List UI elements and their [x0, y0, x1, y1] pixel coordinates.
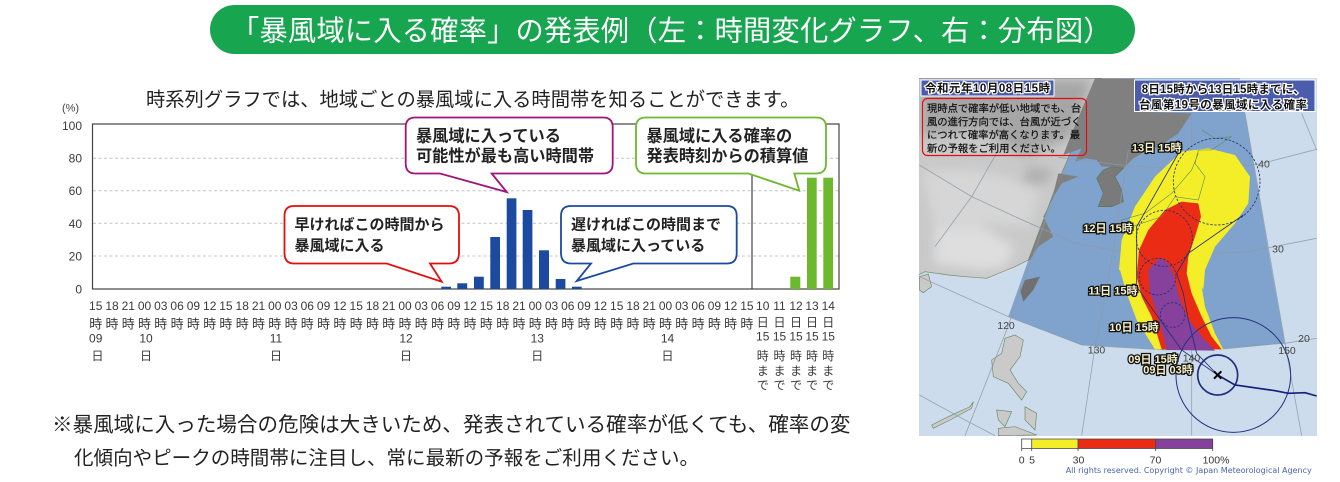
cumulative column labels: 時: [822, 349, 834, 363]
callout: latest time (blue): 遅ければこの時間まで: [571, 216, 721, 234]
y axis labels: 100: [62, 119, 82, 133]
x axis hour labels: 09: [708, 299, 721, 313]
cumulative column labels: 日: [773, 316, 786, 330]
x axis hour labels: 15: [740, 299, 754, 313]
x axis hour labels: 21: [643, 299, 656, 313]
lat and lon labels: 20: [1298, 333, 1310, 345]
Taiwan: [1020, 277, 1040, 302]
forecast time labels: 10日 15時: [1109, 320, 1159, 334]
cumulative column labels: で: [757, 378, 769, 392]
x axis hour labels: 18: [236, 299, 249, 313]
forecast time labels: 12日 15時: [1083, 221, 1133, 235]
x axis date labels: 日: [270, 349, 282, 363]
x axis hour labels: 21: [382, 299, 396, 313]
lat and lon labels: 150: [1278, 345, 1296, 357]
purple area: 70-100%: [1148, 257, 1215, 351]
yellow area: 5-30%: [1119, 148, 1250, 349]
lat and lon labels: [997, 158, 1310, 364]
x axis hour labels: 18: [496, 299, 510, 313]
callout: cumulative value (green): [636, 118, 826, 191]
map note callout: につれて確率が高くなります。最: [927, 128, 1080, 142]
cumulative column labels: 日: [790, 316, 802, 330]
x axis hour labels: 12: [594, 299, 607, 313]
forecast track and circles: [1136, 138, 1317, 432]
x axis hour labels: 09: [447, 299, 461, 313]
x axis date labels: 14: [661, 332, 674, 346]
x axis hour labels: 00: [268, 299, 282, 313]
x axis hour labels: 03: [415, 299, 428, 313]
lat and lon labels: 30: [1272, 244, 1284, 256]
callout: most likely time (purple): 暴風域に入っている: [416, 128, 561, 146]
x axis date labels: 12: [399, 332, 413, 346]
cumulative column labels: 時: [790, 349, 802, 363]
legend: probability colour scale: 30: [1073, 454, 1084, 466]
y axis labels: 20: [69, 250, 82, 264]
Philippines: [932, 335, 1037, 436]
x axis date labels: 日: [531, 349, 543, 363]
callout: most likely time (purple): [406, 118, 613, 192]
x axis hour labels: 06: [691, 299, 705, 313]
probability heading box: [1134, 80, 1315, 112]
x axis hour labels: 12: [463, 299, 477, 313]
x axis hour labels: [89, 299, 754, 332]
note text: 化傾向やピークの時間帯に注目し、常に最新の予報をご利用ください。: [74, 448, 699, 470]
x axis hour labels: 15: [480, 299, 493, 313]
legend: probability colour scale: 0: [1019, 454, 1025, 466]
cumulative column labels: 日: [757, 316, 769, 330]
legend: probability colour scale: [1019, 439, 1229, 466]
cumulative column labels: 11: [773, 299, 786, 313]
x axis hour labels: 12: [333, 299, 347, 313]
x axis hour labels: 15: [219, 299, 233, 313]
x axis hour labels: 03: [154, 299, 168, 313]
probability heading box: 8日15時から13日15時までに、: [1142, 82, 1305, 96]
callout: latest time (blue): 暴風域に入っている: [571, 238, 705, 254]
y axis labels: 0: [75, 282, 82, 296]
blue bars: probability per time slot: [441, 198, 582, 289]
cumulative column labels: 日: [806, 316, 818, 330]
x axis date labels: 日: [91, 349, 104, 363]
x axis date labels: 09: [89, 332, 103, 346]
cumulative column labels: で: [773, 378, 786, 392]
lat and lon labels: 130: [1088, 344, 1105, 356]
x axis hour labels: 06: [431, 299, 445, 313]
x axis hour labels: 18: [366, 299, 379, 313]
cumulative column labels: ま: [790, 364, 802, 378]
x axis hour labels: 21: [512, 299, 526, 313]
typhoon centre mark: [1214, 371, 1221, 379]
y axis labels: 40: [69, 217, 82, 231]
panel: probability distribution map: [915, 78, 1317, 436]
y axis labels: 60: [69, 184, 82, 198]
lat and lon labels: 120: [997, 320, 1015, 332]
copyright text: All rights reserved. Copyright © Japan Meteorological Agency: [1066, 466, 1312, 475]
green bars: cumulative probability: [790, 178, 833, 289]
x axis date labels: 日: [140, 349, 152, 363]
legend: probability colour scale: 5: [1029, 454, 1035, 466]
cumulative column labels: [756, 299, 835, 392]
x axis hour labels: 18: [105, 299, 119, 313]
x axis hour labels: 00: [659, 299, 672, 313]
map note callout: [922, 98, 1086, 156]
map note callout: 現時点で確率が低い地域でも、台: [927, 102, 1081, 115]
cumulative column labels: 15: [805, 330, 819, 344]
x axis hour labels: 09: [317, 299, 331, 313]
callout: earliest time (red): 早ければこの時間から: [294, 216, 445, 234]
cumulative column labels: ま: [806, 364, 818, 378]
x axis hour labels: 06: [561, 299, 575, 313]
x axis hour labels: 00: [529, 299, 542, 313]
cumulative column labels: 12: [789, 299, 803, 313]
cumulative column labels: 時: [806, 349, 818, 363]
x axis date labels: 日: [661, 349, 674, 363]
cumulative column labels: ま: [757, 364, 769, 378]
x axis hour labels: 03: [675, 299, 689, 313]
red area: 30-70%: [1137, 202, 1222, 349]
map geography and probability areas: [915, 78, 1317, 436]
forecast time labels: 13日 15時: [1132, 140, 1181, 154]
x axis hour labels: 12: [203, 299, 217, 313]
x axis hour labels: 21: [252, 299, 265, 313]
callout: earliest time (red): 暴風域に入る: [294, 238, 385, 254]
x axis hour labels: 03: [284, 299, 298, 313]
cumulative column labels: で: [790, 378, 802, 392]
cumulative column labels: 15: [822, 330, 835, 344]
forecast time labels: 09日 15時: [1128, 352, 1178, 366]
x axis date labels: 11: [270, 332, 283, 346]
map note callout: 新の予報をご利用ください。: [927, 142, 1061, 155]
map note callout: 風の進行方向では、台風が近づく: [927, 116, 1081, 128]
forecast time labels: 09日 03時: [1143, 362, 1193, 376]
x axis hour labels: 15: [350, 299, 363, 313]
x axis hour labels: 15: [610, 299, 624, 313]
note text: [52, 414, 850, 470]
cumulative column labels: 日: [822, 316, 834, 330]
forecast time labels: 11日 15時: [1089, 284, 1137, 298]
x axis hour labels: 06: [170, 299, 184, 313]
x axis hour labels: 00: [138, 299, 151, 313]
cumulative column labels: 13: [805, 299, 819, 313]
lat and lon labels: 40: [1258, 158, 1270, 170]
lat and lon labels: 140: [1183, 352, 1200, 364]
x axis hour labels: 18: [626, 299, 640, 313]
x axis hour labels: 15: [89, 299, 103, 313]
issue date box: 令和元年10月08日15時: [925, 81, 1050, 95]
forecast time labels: [1083, 140, 1193, 376]
Japan coast outline: [1122, 130, 1232, 233]
y axis labels: [62, 102, 82, 296]
x axis hour labels: 00: [398, 299, 412, 313]
cumulative column labels: ま: [822, 364, 834, 378]
x axis date labels: 13: [531, 332, 544, 346]
title banner: 「暴風域に入る確率」の発表例（左：時間変化グラフ、右：分布図）: [231, 14, 1112, 46]
callout: earliest time (red): [284, 206, 459, 282]
cumulative column labels: 15: [773, 330, 786, 344]
cumulative column labels: 15: [789, 330, 803, 344]
x axis hour labels: 06: [301, 299, 314, 313]
x axis hour labels: 時時時時時時時時時時時時時時時時時時時時時時時時時時時時時時時時時時時時時時時時時: [89, 316, 753, 332]
x axis hour labels: 09: [187, 299, 200, 313]
cumulative column labels: 時: [757, 349, 769, 363]
x axis hour labels: 03: [545, 299, 558, 313]
x axis hour labels: 21: [122, 299, 135, 313]
title banner: [210, 5, 1135, 54]
grid lines: [919, 113, 1317, 436]
x axis date labels: 10: [139, 332, 153, 346]
note text: ※暴風域に入った場合の危険は大きいため、発表されている確率が低くても、確率の変: [52, 414, 850, 436]
x axis date labels: [89, 332, 674, 363]
cumulative column labels: 10: [756, 299, 770, 313]
plot frame: [92, 124, 839, 289]
cumulative column labels: 15: [756, 330, 770, 344]
cumulative column labels: 時: [773, 349, 786, 363]
subtitle text: 時系列グラフでは、地域ごとの暴風域に入る時間帯を知ることができます。: [146, 89, 799, 111]
x axis date labels: 日: [400, 349, 412, 363]
x axis hour labels: 12: [724, 299, 738, 313]
probability heading box: 台風第19号の暴風域に入る確率: [1139, 98, 1307, 112]
y axis labels: (%): [62, 102, 79, 114]
callout: latest time (blue): [561, 206, 737, 281]
bar chart: time series probability: [62, 102, 839, 392]
legend: probability colour scale: 100%: [1203, 454, 1229, 466]
callout: cumulative value (green): 発表時刻からの積算値: [646, 146, 808, 166]
cumulative column labels: で: [806, 378, 818, 392]
callout: most likely time (purple): 可能性が最も高い時間帯: [416, 146, 594, 166]
legend: probability colour scale: 70: [1150, 454, 1161, 466]
cumulative column labels: で: [822, 378, 834, 392]
x axis hour labels: 09: [577, 299, 591, 313]
cumulative column labels: ま: [773, 364, 786, 378]
callout: cumulative value (green): 暴風域に入る確率の: [646, 126, 792, 146]
cumulative column labels: 14: [822, 299, 835, 313]
y axis labels: 80: [69, 152, 82, 166]
